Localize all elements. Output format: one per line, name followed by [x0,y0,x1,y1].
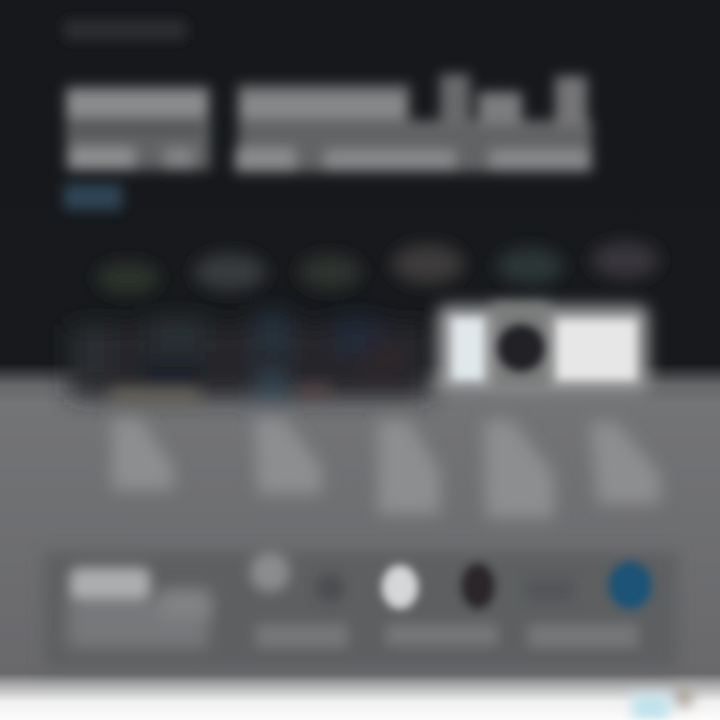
labels row [256,624,638,648]
label 2 [386,624,498,646]
icon: chip 1 [96,261,160,295]
icon: white ellipse [382,565,418,609]
icon: chip 4 [392,244,464,284]
title [66,74,592,172]
label 1 [256,624,348,648]
panel: white card [438,302,648,390]
panel: bottom summary [44,552,678,668]
label 3 [528,624,638,648]
icon: chip 6 [591,241,659,279]
icon: small dark dot [315,573,345,603]
column 4 [484,420,554,518]
icon: blue circle [608,561,652,609]
column 3 [378,420,440,514]
column 2 [254,418,322,494]
header label [64,20,186,40]
icon: chip 3 [298,254,362,290]
icon row [96,241,659,295]
accent stripe [110,386,330,400]
icon: chip 2 [194,253,266,291]
icon: chip 5 [496,247,564,285]
stat block [68,568,210,648]
icon: dark grey block [525,578,575,602]
footer accents [632,688,692,720]
icon: grey circle [250,552,290,592]
icon: black ellipse [461,563,495,609]
blue tag [64,184,122,210]
icon: dark circle [497,324,545,372]
panel: dark cards [70,312,430,403]
column 5 [590,422,660,504]
column 1 [112,418,174,490]
column bars [112,418,660,518]
